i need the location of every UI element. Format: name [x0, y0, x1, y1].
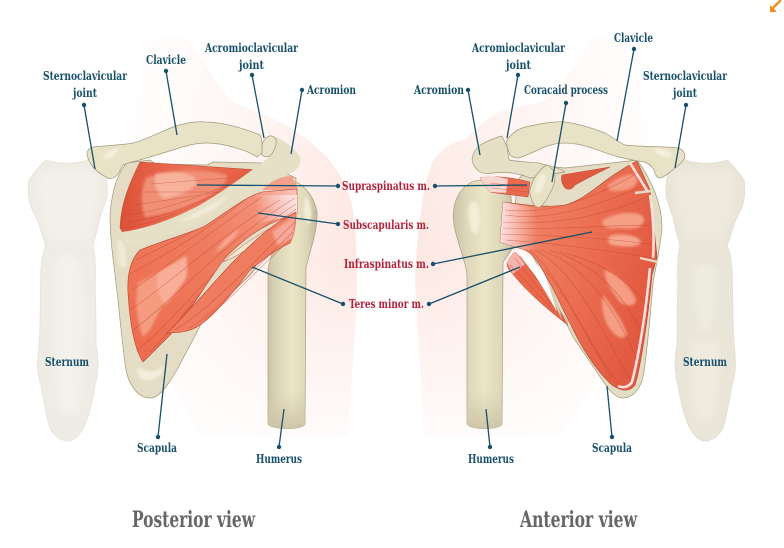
teres minor muscle right: [507, 252, 568, 325]
labels: anterior view bones: joint: [505, 57, 532, 72]
labels: central muscles: Subscapularis m.: [343, 217, 429, 232]
supraspinatus muscle right: [480, 167, 610, 197]
scapula left: [110, 160, 296, 398]
teres minor muscle left: [167, 212, 296, 333]
labels: posterior view bones: Scapula: [137, 440, 178, 455]
labels: central muscles: [342, 178, 430, 311]
body silhouette right: [412, 38, 652, 438]
heading: anterior view: Anterior view: [519, 507, 638, 533]
labels: posterior view bones: Clavicle: [146, 52, 186, 67]
labels: posterior view bones: Humerus: [256, 451, 302, 466]
labels: central muscles: Supraspinatus m.: [342, 178, 430, 193]
body silhouette left: [130, 38, 360, 438]
acromion right: [472, 136, 565, 178]
labels: posterior view bones: Acromioclavicular: [204, 40, 299, 55]
subscapularis muscle right: [500, 161, 658, 390]
labels: anterior view bones: Acromioclavicular: [471, 40, 566, 55]
labels: anterior view bones: Clavicle: [614, 30, 653, 45]
labels: anterior view bones: Sternum: [683, 354, 727, 369]
gap and bone sliver right: [518, 250, 562, 320]
labels: anterior view bones: Coracaid process: [524, 82, 608, 97]
scapula right: [515, 160, 662, 398]
labels: posterior view bones: joint: [238, 57, 265, 72]
labels: posterior view bones: Sternoclavicular: [43, 68, 128, 83]
coracoid process right: [530, 165, 555, 207]
sternum left: [28, 159, 107, 441]
labels: posterior view bones: [43, 40, 356, 466]
labels: posterior view bones: Acromion: [306, 82, 356, 97]
labels: posterior view bones: joint: [72, 85, 98, 100]
labels: anterior view bones: Acromion: [413, 82, 464, 97]
acromion and scapular spine left: [122, 136, 300, 246]
gap sliver left: [223, 222, 282, 262]
sternum right: [666, 159, 745, 441]
labels: central muscles: Teres minor m.: [349, 296, 424, 311]
subscapularis muscle left: [128, 176, 298, 362]
clavicle right: [507, 122, 685, 178]
labels: anterior view bones: [413, 30, 728, 466]
labels: anterior view bones: Sternoclavicular: [643, 68, 728, 83]
labels: central muscles: Infraspinatus m.: [344, 256, 429, 271]
humerus left: [268, 180, 317, 428]
clavicle left: [87, 122, 276, 179]
supraspinatus muscle left: [120, 162, 258, 233]
panel: anterior view illustration: [412, 38, 745, 441]
humerus right: [453, 180, 515, 428]
leader lines and dots: [82, 47, 688, 449]
labels: posterior view bones: Sternum: [45, 354, 89, 369]
labels: anterior view bones: joint: [672, 85, 698, 100]
labels: anterior view bones: Humerus: [468, 451, 514, 466]
heading: posterior view: Posterior view: [132, 507, 256, 533]
corner arrow icon: [770, 0, 781, 12]
labels: anterior view bones: Scapula: [592, 440, 633, 455]
panel: posterior view illustration: [28, 38, 360, 441]
